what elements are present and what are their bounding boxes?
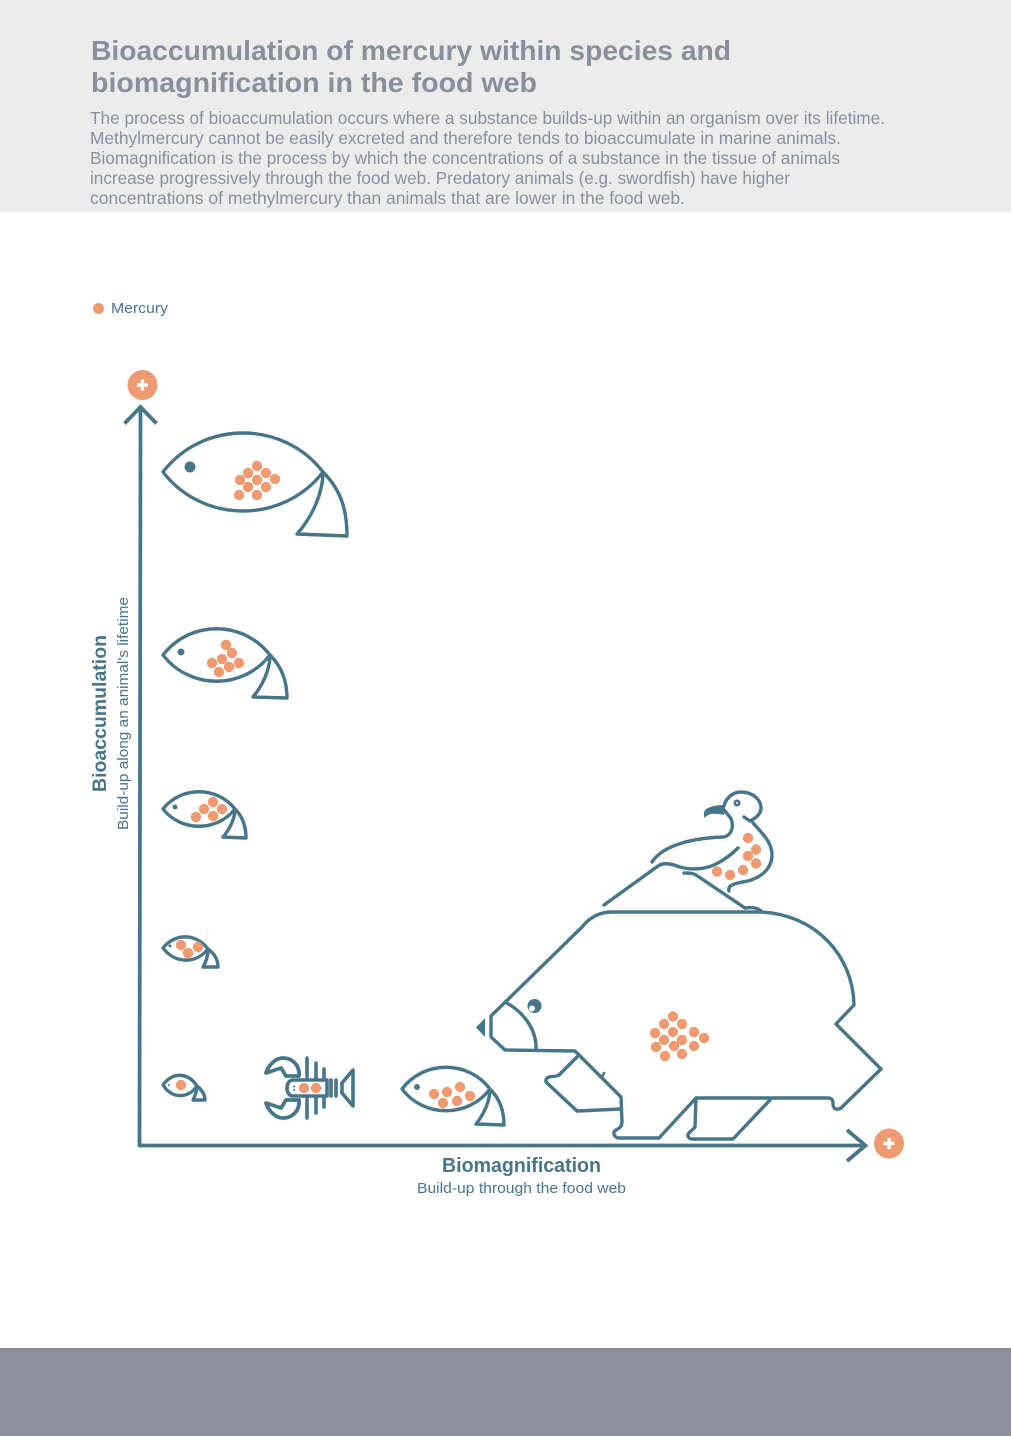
x axis label: Biomagnification <box>442 1155 601 1177</box>
lobster <box>266 1058 353 1118</box>
bird lower outline <box>604 848 738 905</box>
bear face <box>505 1002 536 1050</box>
intro text: Methylmercury cannot be easily excreted and therefore tends to bioaccumulate in marine animals. <box>90 128 841 148</box>
intro text: increase progressively through the food web. Predatory animals (e.g. swordfish) have higher <box>90 168 790 188</box>
icon: plus top <box>128 370 158 400</box>
bear nose <box>476 1018 485 1037</box>
bird leg <box>684 873 761 911</box>
header panel <box>0 0 1011 212</box>
fish 2 <box>163 629 287 698</box>
lobster legs <box>307 1058 336 1118</box>
y axis label: Build-up along an animal's lifetime <box>116 597 132 830</box>
bird beak <box>704 805 724 818</box>
polar bear <box>476 912 881 1139</box>
lobster tail <box>342 1070 353 1106</box>
lobster claws <box>266 1058 299 1118</box>
x axis label <box>417 1155 626 1197</box>
fish 5 small <box>163 1075 205 1100</box>
bear front leg <box>546 1057 621 1111</box>
fish 4 <box>163 937 218 967</box>
title: biomagnification in the food web <box>91 67 537 98</box>
bird head <box>723 792 761 821</box>
icon: plus right <box>874 1128 904 1158</box>
y axis label <box>90 597 132 830</box>
bird back and neck <box>652 810 732 862</box>
bear shoulder notch <box>602 1073 604 1077</box>
footer band <box>0 1348 1011 1436</box>
vertical axis arrow <box>124 407 156 1146</box>
bird eye <box>734 800 740 806</box>
x axis label: Build-up through the food web <box>417 1180 626 1197</box>
fish 3 <box>163 792 246 838</box>
horizontal axis arrow <box>138 1130 866 1161</box>
fish 1 large <box>163 433 347 536</box>
legend: mercury: Mercury <box>111 300 169 317</box>
fish 6 prey <box>402 1067 504 1125</box>
title: Bioaccumulation of mercury within species and <box>91 35 731 66</box>
bear body <box>491 912 881 1138</box>
bear dots <box>650 1011 709 1061</box>
intro text: Biomagnification is the process by which the concentrations of a substance in the tissue of animals <box>90 148 840 168</box>
y axis label: Bioaccumulation <box>90 635 111 792</box>
intro text: concentrations of methylmercury than animals that are lower in the food web. <box>90 188 685 208</box>
seabird <box>604 792 772 911</box>
bird dots <box>712 833 761 880</box>
title <box>91 35 731 98</box>
intro text <box>90 108 885 208</box>
intro text: The process of bioaccumulation occurs where a substance builds-up within an organism over its lifetime. <box>90 108 885 128</box>
bear eye <box>528 999 542 1013</box>
bear back leg <box>688 1098 770 1139</box>
bird breast <box>729 823 772 891</box>
